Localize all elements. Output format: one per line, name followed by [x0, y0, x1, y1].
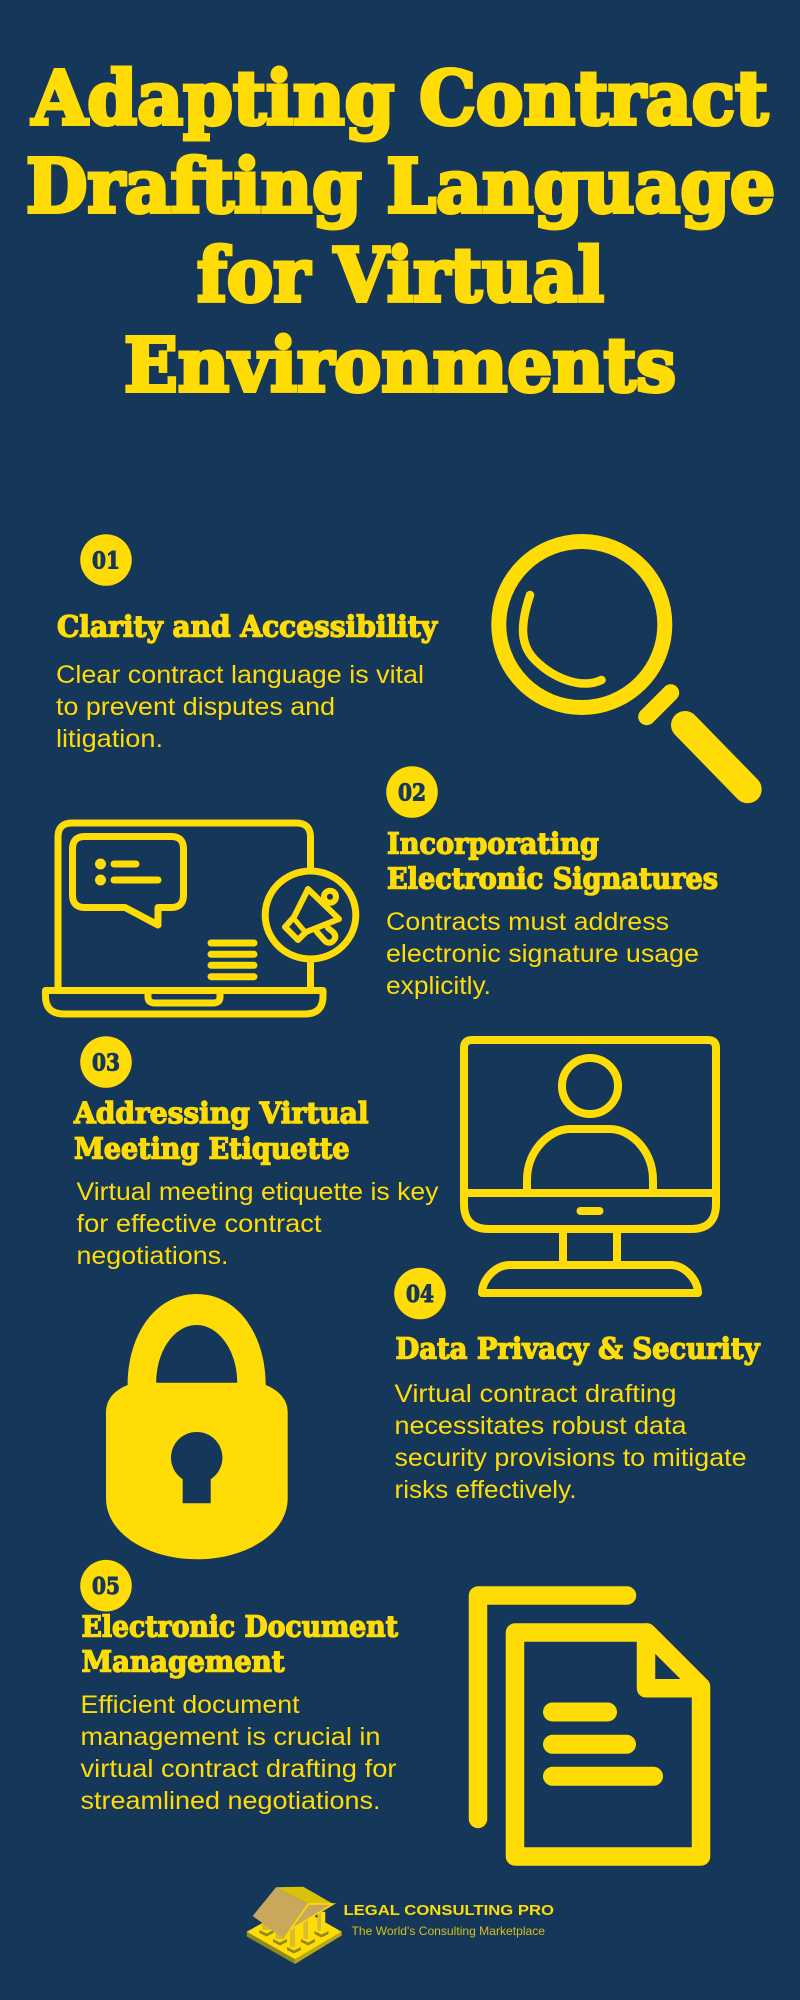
icon: laptop with chat and megaphone — [46, 823, 356, 1014]
heading: virtual meeting etiquette — [73, 1096, 368, 1166]
title: for Virtual — [197, 233, 604, 319]
panel: data privacy and security — [106, 1268, 761, 1559]
heading: data privacy and security: Data Privacy & Security — [396, 1332, 761, 1366]
body text: electronic signatures: electronic signature usage — [386, 940, 699, 968]
body text: electronic signatures: explicitly. — [386, 972, 491, 1000]
body text: clarity: litigation. — [56, 725, 163, 753]
body text: data privacy — [394, 1380, 746, 1504]
panel: electronic document management — [80, 1560, 701, 1856]
heading: electronic signatures: Incorporating — [387, 826, 599, 860]
number badge 04: 04 — [406, 1281, 434, 1308]
body text: virtual meeting etiquette — [76, 1178, 439, 1270]
icon: documents — [478, 1596, 701, 1856]
body text: virtual meeting etiquette: for effective contract — [76, 1210, 322, 1238]
body text: clarity — [56, 661, 424, 753]
body text: virtual meeting etiquette: Virtual meeting etiquette is key — [76, 1178, 439, 1206]
heading: electronic document management — [82, 1610, 399, 1678]
body text: document management: virtual contract drafting for — [80, 1755, 396, 1783]
body text: document management: streamlined negotiations. — [80, 1787, 380, 1815]
body text: electronic signatures — [386, 908, 699, 1000]
heading: virtual meeting etiquette: Meeting Etiquette — [74, 1132, 350, 1166]
number badge 05: 05 — [92, 1573, 120, 1600]
body text: data privacy: risks effectively. — [394, 1476, 576, 1504]
number badge 01: 01 — [92, 548, 120, 574]
heading: virtual meeting etiquette: Addressing Virtual — [73, 1096, 368, 1130]
title — [26, 56, 775, 409]
icon: padlock — [106, 1294, 288, 1559]
heading: clarity and accessibility: Clarity and Accessibility — [57, 610, 438, 644]
number badge 03 — [80, 1036, 132, 1088]
number badge 03: 03 — [92, 1050, 120, 1076]
title: Adapting Contract — [31, 56, 768, 142]
tagline: The World's Consulting Marketplace — [352, 1924, 545, 1938]
number badge 04 — [394, 1268, 446, 1319]
number badge 05 — [80, 1560, 132, 1611]
body text: document management: Efficient document — [80, 1691, 300, 1719]
body text: data privacy: security provisions to mitigate — [394, 1444, 746, 1472]
body text: clarity: to prevent disputes and — [56, 693, 335, 721]
panel: virtual meeting etiquette — [73, 1036, 716, 1293]
heading: electronic signatures — [387, 826, 718, 896]
heading: electronic document management: Management — [82, 1644, 285, 1678]
body text: document management: management is crucial in — [80, 1723, 381, 1751]
icon: temple logo — [247, 1887, 342, 1964]
heading: electronic signatures: Electronic Signatures — [387, 862, 718, 896]
brand name: LEGAL CONSULTING PRO — [344, 1903, 554, 1919]
number badge 02 — [386, 766, 438, 818]
number badge 01 — [80, 534, 132, 586]
title: Environments — [124, 323, 676, 409]
panel: electronic signatures — [46, 766, 718, 1014]
body text: data privacy: Virtual contract drafting — [394, 1380, 676, 1408]
body text: document management — [80, 1691, 396, 1815]
body text: electronic signatures: Contracts must address — [386, 908, 669, 936]
body text: clarity: Clear contract language is vital — [56, 661, 424, 689]
footer logo — [247, 1887, 554, 1964]
heading: electronic document management: Electronic Document — [82, 1610, 399, 1644]
body text: data privacy: necessitates robust data — [394, 1412, 687, 1440]
body text: virtual meeting etiquette: negotiations. — [76, 1242, 228, 1270]
panel: clarity and accessibility — [56, 534, 748, 789]
icon: magnifying glass — [499, 542, 748, 789]
icon: monitor with person — [464, 1040, 716, 1293]
title: Drafting Language — [26, 144, 775, 230]
number badge 02: 02 — [398, 780, 426, 806]
